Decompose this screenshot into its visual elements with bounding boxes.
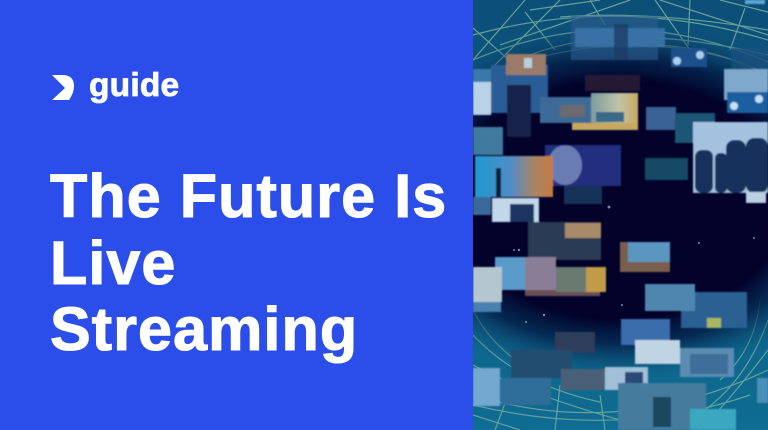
- thumbnails face and presenter: [545, 145, 621, 186]
- panel: blue title panel: [0, 0, 473, 430]
- collage of video thumbnails: [473, 0, 768, 430]
- stars: [513, 206, 755, 323]
- background gradient: [473, 0, 768, 430]
- panel: live streaming collage image: [473, 0, 768, 430]
- thumbnails upper left: [491, 65, 548, 113]
- thumbnails centre: [540, 97, 591, 123]
- thumbnails lower: [555, 332, 595, 353]
- thumbnails middle: [528, 222, 601, 260]
- globe grid lines bottom: [473, 300, 768, 430]
- thumbnails silhouettes group: [693, 122, 768, 193]
- title line 3: Streaming: [50, 295, 358, 363]
- icon: guide logo arrow: [52, 75, 74, 100]
- dark globe centre: [473, 0, 768, 430]
- logo wordmark: guide: [89, 67, 179, 104]
- title line 1: The Future Is: [50, 162, 447, 230]
- title: [50, 162, 447, 364]
- thumbnails top: [571, 16, 658, 60]
- globe grid lines top: [473, 0, 768, 75]
- title line 2: Live: [50, 229, 176, 297]
